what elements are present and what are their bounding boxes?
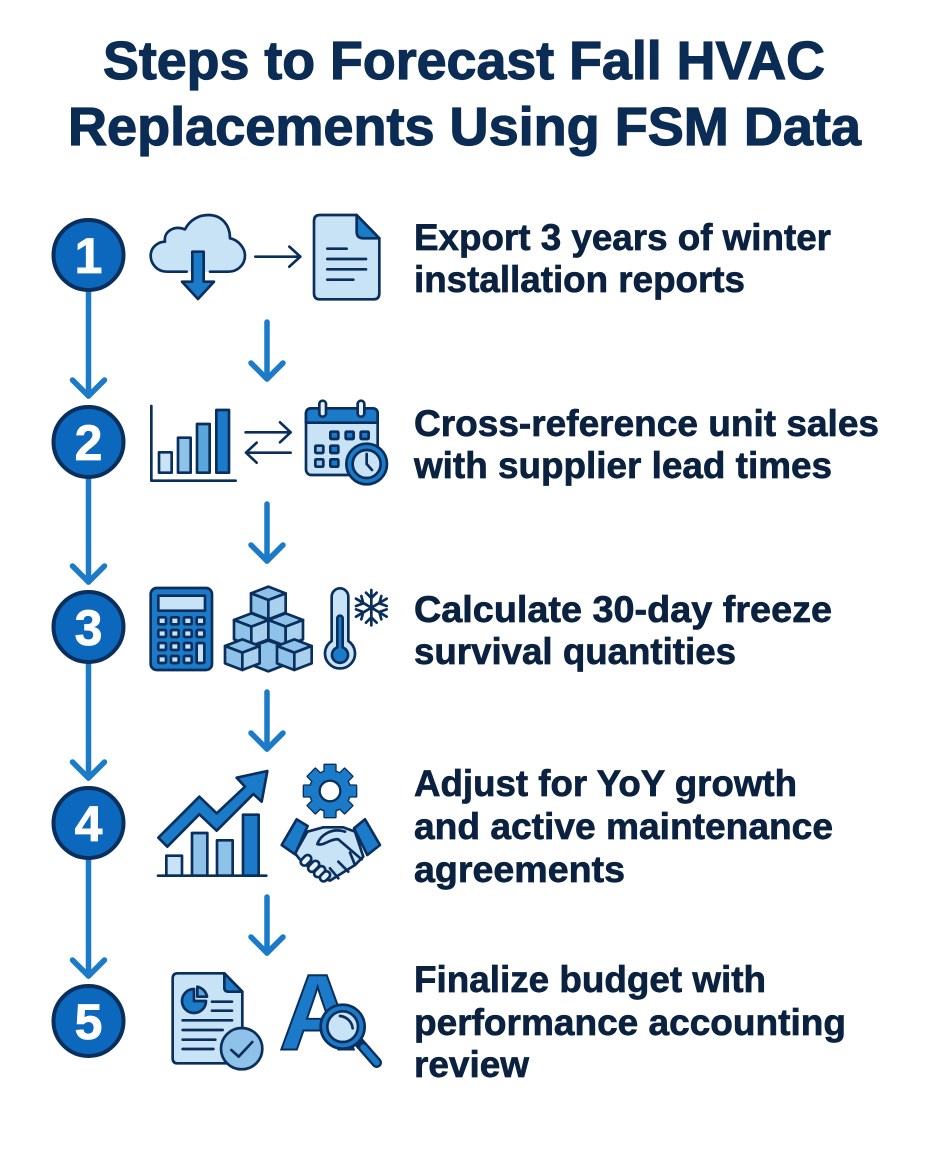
number badge 2: 2	[75, 415, 102, 471]
number badge 1	[54, 220, 124, 290]
icon: letter A with magnifier: A	[279, 951, 357, 1072]
step 3 text: Calculate 30-day freeze	[414, 589, 832, 630]
icon: stacked boxes	[225, 587, 312, 671]
arrow: icons 1 to icons 2	[251, 322, 283, 379]
step 2 text	[413, 403, 879, 486]
icon: thermometer	[325, 588, 355, 668]
icon: cloud download	[151, 215, 245, 299]
icon: two-way arrows	[246, 422, 291, 463]
number badge 5	[54, 986, 124, 1056]
step 5 text: review	[414, 1044, 529, 1085]
icon: snowflake	[356, 590, 387, 625]
step 4	[54, 763, 833, 890]
step 1 text	[414, 217, 831, 300]
step 3 text: survival quantities	[414, 631, 736, 672]
step 4 text	[414, 763, 833, 890]
step 1	[54, 215, 831, 300]
step 2	[54, 401, 879, 486]
icon: document	[314, 215, 379, 299]
step 5 text: performance accounting	[414, 1002, 846, 1043]
arrow: step 1 to step 2	[72, 291, 104, 396]
step 2 text: with supplier lead times	[413, 445, 832, 486]
arrow: step 4 to step 5	[72, 859, 104, 976]
number badge 4: 4	[75, 796, 103, 852]
icon: gear	[304, 765, 356, 817]
step 3	[54, 587, 832, 672]
icon: growth chart	[158, 771, 267, 876]
step 4 text: and active maintenance	[414, 806, 833, 847]
step 2 text: Cross-reference unit sales	[414, 403, 879, 444]
step 4 text: agreements	[414, 849, 625, 890]
step 5	[54, 951, 846, 1085]
number badge 2	[54, 407, 124, 477]
number badge 1: 1	[75, 228, 102, 284]
number badge 3: 3	[75, 600, 102, 656]
step 5 text	[414, 959, 846, 1085]
arrow: icons 4 to icons 5	[251, 897, 283, 953]
step 1 text: Export 3 years of winter	[414, 217, 831, 258]
icon: report with checkmark	[173, 973, 262, 1069]
icon: calendar with clock	[306, 401, 387, 484]
arrow: step 2 to step 3	[72, 478, 104, 582]
arrow: cloud to document	[255, 247, 300, 267]
step 4 text: Adjust for YoY growth	[414, 763, 797, 804]
step 1 text: installation reports	[414, 259, 745, 300]
number badge 5: 5	[75, 994, 102, 1050]
title	[68, 31, 862, 157]
title: Replacements Using FSM Data	[68, 97, 862, 157]
step 5 text: Finalize budget with	[414, 959, 766, 1000]
arrow: step 3 to step 4	[72, 663, 104, 778]
icon: calculator	[151, 588, 212, 670]
icon: handshake	[282, 819, 380, 883]
icon: bar chart	[151, 406, 236, 481]
step 3 text	[414, 589, 832, 672]
arrow: icons 3 to icons 4	[251, 692, 283, 749]
arrow: icons 2 to icons 3	[251, 504, 283, 561]
title: Steps to Forecast Fall HVAC	[103, 31, 825, 91]
number badge 3	[54, 592, 124, 662]
number badge 4	[54, 788, 124, 858]
